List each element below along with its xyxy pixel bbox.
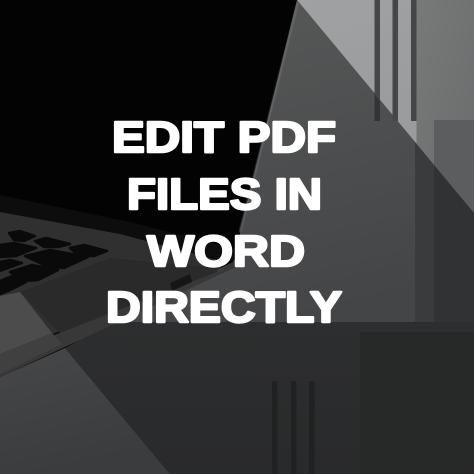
panel: darker square lower right: [360, 332, 474, 474]
stripes: bottom bars: [272, 381, 314, 474]
title: [106, 114, 342, 332]
keyboard keys: [0, 231, 107, 294]
stripes: top-right bars: [374, 0, 416, 121]
panel: darker right part of light triangle: [416, 0, 474, 213]
port: [170, 274, 192, 291]
panel: dark lower area: [65, 322, 474, 474]
trackpad light wedge: [0, 292, 52, 354]
panel: bottom-left floor: [0, 348, 170, 474]
panel: dark column right of field: [415, 142, 474, 340]
title line 2: FILES IN: [127, 171, 322, 219]
screen edge highlight: [240, 2, 298, 232]
front edge light wedge: [0, 333, 62, 374]
laptop: [0, 195, 240, 377]
laptop deck: [0, 212, 225, 354]
laptop hinge: [0, 195, 240, 262]
laptop front edge: [0, 262, 238, 377]
title line 1: EDIT PDF: [112, 114, 336, 162]
title line 3: WORD: [147, 228, 305, 276]
title line 4: DIRECTLY: [106, 284, 342, 332]
laptop deck dark side: [20, 258, 217, 335]
panel: grey middle field: [113, 0, 474, 340]
panel: light top-right triangle: [297, 0, 474, 213]
panel: dark square over light area: [434, 120, 474, 213]
panel: darker square over shadow area: [434, 165, 474, 340]
